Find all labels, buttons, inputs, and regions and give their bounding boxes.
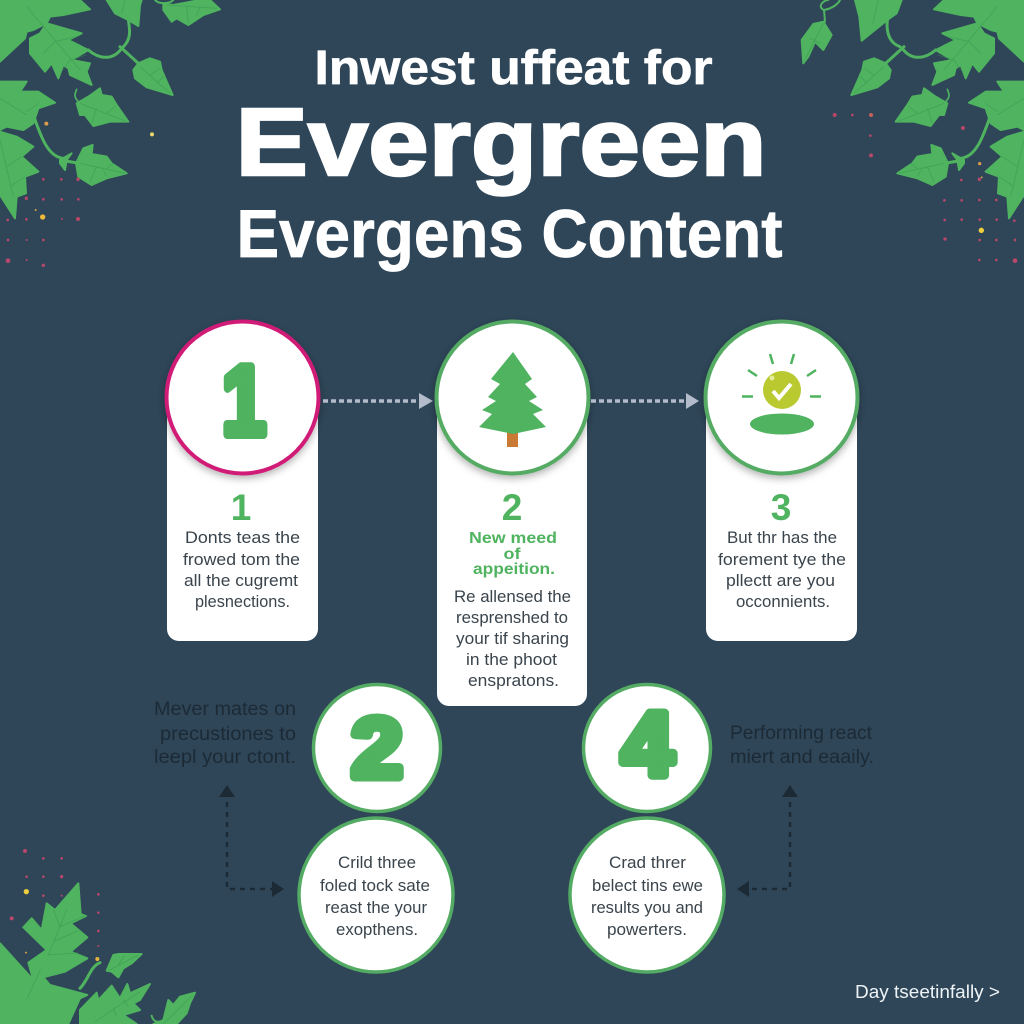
right side note: miert and eaaily. [730, 747, 874, 768]
step 2 text [454, 588, 571, 690]
left side note: Mever mates on [154, 699, 296, 720]
right side note: Performing react [730, 723, 873, 744]
left side note: precustiones to [160, 724, 296, 745]
circle badge 2 [436, 322, 588, 474]
footer link: Day tseetinfally > [855, 982, 1000, 1002]
foliage: top right [851, 0, 1024, 218]
right side note [730, 723, 874, 768]
step 2 text: your tif sharing [456, 630, 569, 648]
circle badge 1 [166, 322, 318, 474]
step 1 text: frowed tom the [183, 551, 300, 569]
step number 2: 2 [502, 487, 522, 528]
circle text: lower right [570, 818, 724, 972]
step 2 heading: appeition. [473, 561, 555, 578]
left side note [154, 699, 296, 768]
step 2 heading: New meed [469, 530, 557, 547]
panel: step 3 [706, 322, 858, 641]
step 2 text: Re allensed the [454, 588, 571, 606]
circle: big numeral 2: 2 [352, 701, 402, 795]
card 3 [706, 398, 857, 641]
circle badge 3 [706, 322, 858, 474]
step 3 text: forement tye the [718, 551, 846, 569]
decorative dots: top left [6, 122, 154, 267]
decorative dots: top right [833, 113, 1017, 263]
circle text: lower left [299, 818, 453, 972]
foliage: top right upper leaves [802, 0, 902, 63]
step 1 text [183, 529, 300, 611]
circle text: lower left: foled tock sate [320, 877, 430, 895]
step 2 text: enspratons. [468, 672, 559, 690]
arrow: lower right elbow [737, 785, 798, 897]
panel: step 2 [436, 322, 588, 706]
foliage: bottom left [0, 883, 195, 1024]
arrow: step 2 to step 3 [591, 393, 699, 409]
circle text: lower right: results you and [591, 899, 703, 917]
arrow: step 1 to step 2 [323, 393, 433, 409]
step 1 text: plesnections. [195, 593, 290, 611]
step number 1: 1 [231, 487, 251, 528]
foliage: top left [0, 0, 220, 218]
step 2 text: resprenshed to [456, 609, 568, 627]
title line 1: Inwest uffeat for [314, 42, 712, 95]
title line 3: Evergens Content [236, 196, 782, 272]
circle text: lower left: Crild three [338, 854, 416, 872]
circle text: lower left: reast the your [325, 899, 428, 917]
panel: step 1 [166, 322, 318, 641]
card 1 [167, 398, 318, 641]
step 3 text: But thr has the [727, 529, 837, 547]
title [236, 42, 782, 272]
step 1 text: Donts teas the [185, 529, 300, 547]
arrow: lower left elbow [219, 785, 284, 897]
step 1 text: all the cugremt [184, 572, 298, 590]
decorative dots: bottom left [10, 849, 100, 961]
circle text: lower right: Crad threr [609, 854, 687, 872]
left side note: leepl your ctont. [154, 747, 296, 768]
step 3 text [718, 529, 846, 611]
circle text: lower right: belect tins ewe [592, 877, 703, 895]
step 3 text: occonnients. [736, 593, 830, 611]
circle text: lower right: powerters. [607, 921, 687, 939]
title line 2: Evergreen [236, 89, 766, 196]
step 2 heading [469, 530, 557, 578]
step number 3: 3 [771, 487, 791, 528]
circle: big numeral 2 [314, 684, 440, 812]
icon: evergreen tree [479, 352, 546, 447]
card 2 [437, 398, 587, 706]
step 3 text: pllectt are you [726, 572, 835, 590]
big numeral 1: 1 [222, 346, 266, 456]
circle text: lower left: exopthens. [336, 921, 418, 939]
icon: sun with checkmark [742, 354, 821, 434]
circle: big numeral 4 [584, 684, 710, 812]
step 2 text: in the phoot [466, 651, 557, 669]
circle: big numeral 4: 4 [622, 695, 674, 795]
step 2 heading: of [504, 546, 521, 563]
